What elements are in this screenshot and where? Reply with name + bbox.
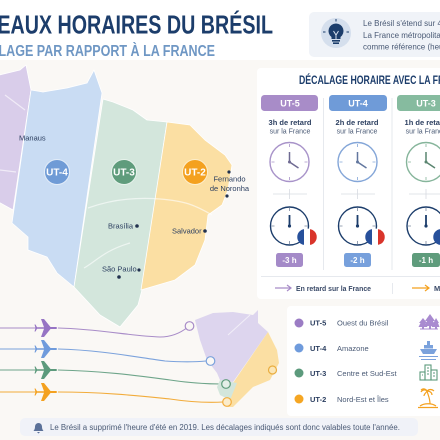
icon: French flag [433, 228, 440, 246]
column UT-4: UT-4 [348, 98, 368, 108]
column UT-4: 2h de retard [336, 118, 379, 127]
legend row UT-4 [294, 344, 369, 353]
column UT-3: -1 h [419, 256, 433, 265]
column UT-5: UT-5 [280, 98, 300, 108]
legend bar [261, 276, 440, 294]
legend row UT-2 [294, 394, 389, 404]
info text [363, 19, 440, 52]
city labels: São Paulo [102, 264, 137, 274]
city labels [19, 134, 250, 279]
column UT-3 [397, 95, 440, 267]
clock: France time [338, 207, 376, 245]
clock: local time [406, 142, 440, 182]
route UT-2 [0, 383, 223, 402]
zone UT-5 west [0, 65, 31, 210]
callout: info box [309, 12, 440, 57]
badge UT-4: UT-4 [46, 168, 68, 178]
column UT-5 [261, 95, 318, 267]
city labels: Salvador [172, 226, 202, 236]
legend row UT-5: Ouest du Brésil [337, 318, 389, 328]
icon: French flag [365, 228, 385, 246]
footer text: Le Brésil a supprimé l'heure d'été en 2019. Les décalages indiqués sont donc valables toute l'année. [50, 423, 400, 432]
clock: France time [407, 207, 440, 245]
badge UT-2 [182, 160, 208, 184]
legend row UT-4: UT-4 [310, 344, 327, 353]
route UT-3 [0, 361, 222, 384]
icon: city [420, 365, 437, 380]
column UT-4: sur la France [337, 128, 378, 136]
legend row UT-2: Nord-Est et Îles [337, 395, 389, 404]
icon: bell [34, 423, 44, 434]
map of Brazil time zones [0, 65, 250, 327]
legend row UT-3: Centre et Sud-Est [337, 369, 398, 378]
column UT-5: 3h de retard [269, 118, 312, 127]
column UT-5: -3 h [282, 256, 297, 265]
zone UT-2 north-east [141, 122, 232, 290]
legend row UT-3: UT-3 [310, 369, 326, 378]
legend row UT-3 [294, 368, 398, 378]
icon: French flag [297, 228, 317, 246]
icon: light bulb [321, 18, 351, 48]
city labels: Brasília [108, 222, 134, 230]
column UT-3: UT-3 [416, 98, 436, 108]
icon: palm island [418, 389, 438, 408]
icon: forest [418, 314, 440, 330]
column UT-4 [329, 95, 387, 267]
arrow: less behind [412, 285, 429, 291]
zone UT-4 Amazon [12, 70, 102, 287]
panel: time difference with France [257, 68, 440, 299]
flight routes [0, 319, 223, 402]
clock: local time [270, 142, 309, 182]
legend bar: En retard sur la France [296, 284, 371, 293]
legend panel [287, 306, 440, 416]
legend row UT-4: Amazone [337, 344, 369, 353]
city labels: Manaus [19, 134, 46, 142]
badge UT-4 [44, 160, 70, 184]
clock: local time [338, 142, 377, 182]
legend row UT-5: UT-5 [310, 318, 326, 328]
arrow: behind France [275, 285, 291, 291]
badge UT-3 [112, 160, 136, 184]
clock: France time [270, 207, 308, 245]
route UT-4 [0, 340, 206, 362]
legend row UT-5 [294, 318, 389, 328]
mini map of France [185, 310, 279, 407]
badge UT-3: UT-3 [113, 168, 135, 178]
legend row UT-2: UT-2 [310, 395, 326, 404]
column UT-5: sur la France [270, 128, 311, 136]
footer note [20, 418, 418, 436]
city labels: de Noronha [210, 184, 250, 193]
column UT-4: -2 h [350, 256, 365, 265]
route UT-5 [0, 319, 188, 337]
icon: boat [419, 341, 438, 360]
zone UT-3 centre and south-east [74, 99, 167, 327]
badge UT-2: UT-2 [184, 168, 206, 178]
city labels: Fernando [213, 174, 246, 184]
